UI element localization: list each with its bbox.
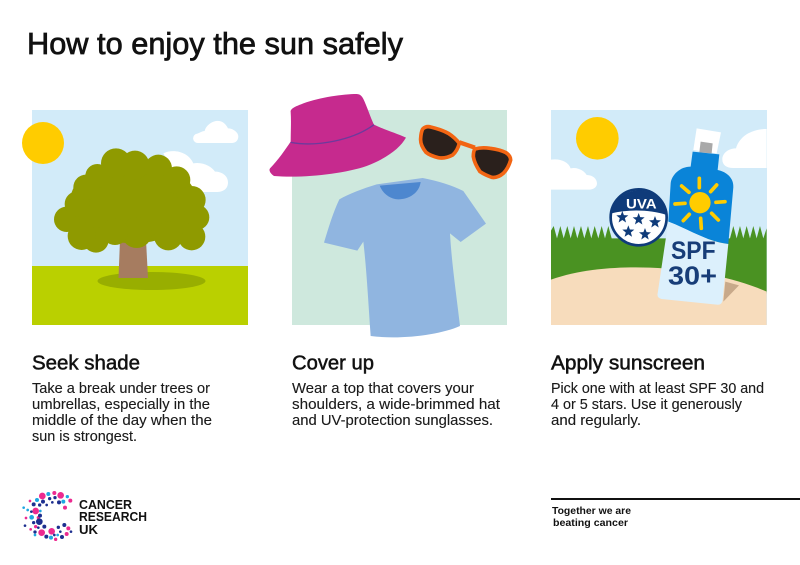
- icon: t-shirt: [324, 178, 486, 337]
- icon: bottle: [657, 128, 733, 305]
- sand: [551, 267, 767, 325]
- text block: cover up: shoulders, a wide-brimmed hat: [292, 397, 500, 413]
- logo wordmark: CANCER: [79, 497, 133, 512]
- shadow: [98, 272, 206, 290]
- tagline: [551, 498, 800, 529]
- icon: clouds: [551, 129, 767, 190]
- text block: seek shade: umbrellas, especially in the: [32, 397, 210, 413]
- bottle label: SPF 30+: SPF: [671, 238, 716, 265]
- logo wordmark: [79, 497, 147, 537]
- text block: apply sunscreen: and regularly.: [551, 413, 641, 429]
- panel: apply sunscreen illustration: [551, 110, 767, 325]
- text block: cover up: and UV-protection sunglasses.: [292, 413, 493, 429]
- panel: cover up illustration: [269, 94, 511, 337]
- heading: seek shade: Seek shade: [32, 352, 140, 374]
- text block: apply sunscreen: [551, 381, 764, 429]
- heading: apply sunscreen: Apply sunscreen: [551, 352, 705, 374]
- title: How to enjoy the sun safely: [27, 26, 403, 61]
- bottle shadow: [723, 282, 739, 302]
- bottle label: SPF 30+: 30+: [668, 261, 717, 291]
- ground: [32, 266, 248, 325]
- bottle label: SPF 30+: [668, 238, 717, 291]
- icon: hat: [269, 94, 406, 177]
- text block: seek shade: [32, 381, 212, 445]
- icon: UVA badge: UVA: [626, 196, 657, 212]
- text block: seek shade: Take a break under trees or: [32, 381, 210, 397]
- grass: [551, 226, 767, 293]
- heading: cover up: Cover up: [292, 352, 374, 374]
- tagline: Together we are: [552, 505, 631, 517]
- logo: Cancer Research UK: [23, 491, 147, 541]
- icon: bottle sun: [675, 178, 725, 228]
- logo mark: dots: [23, 491, 72, 541]
- panel: seek shade illustration: [22, 110, 248, 325]
- text block: apply sunscreen: Pick one with at least SPF 30 and: [551, 381, 764, 397]
- text block: seek shade: sun is strongest.: [32, 429, 137, 445]
- text block: seek shade: middle of the day when the: [32, 413, 212, 429]
- logo wordmark: UK: [79, 522, 99, 537]
- icon: UVA badge: [611, 189, 667, 245]
- text block: cover up: [292, 381, 500, 429]
- icon: tree canopy: [54, 148, 209, 253]
- icon: sunglasses: [421, 127, 511, 177]
- icon: clouds: [163, 121, 238, 192]
- text block: cover up: Wear a top that covers your: [292, 381, 474, 397]
- icon: sun: [22, 122, 64, 164]
- icon: sun: [576, 117, 619, 160]
- icon: tree trunk: [118, 240, 148, 278]
- logo wordmark: RESEARCH: [79, 509, 147, 524]
- tagline: beating cancer: [553, 517, 628, 529]
- text block: apply sunscreen: 4 or 5 stars. Use it generously: [551, 397, 743, 413]
